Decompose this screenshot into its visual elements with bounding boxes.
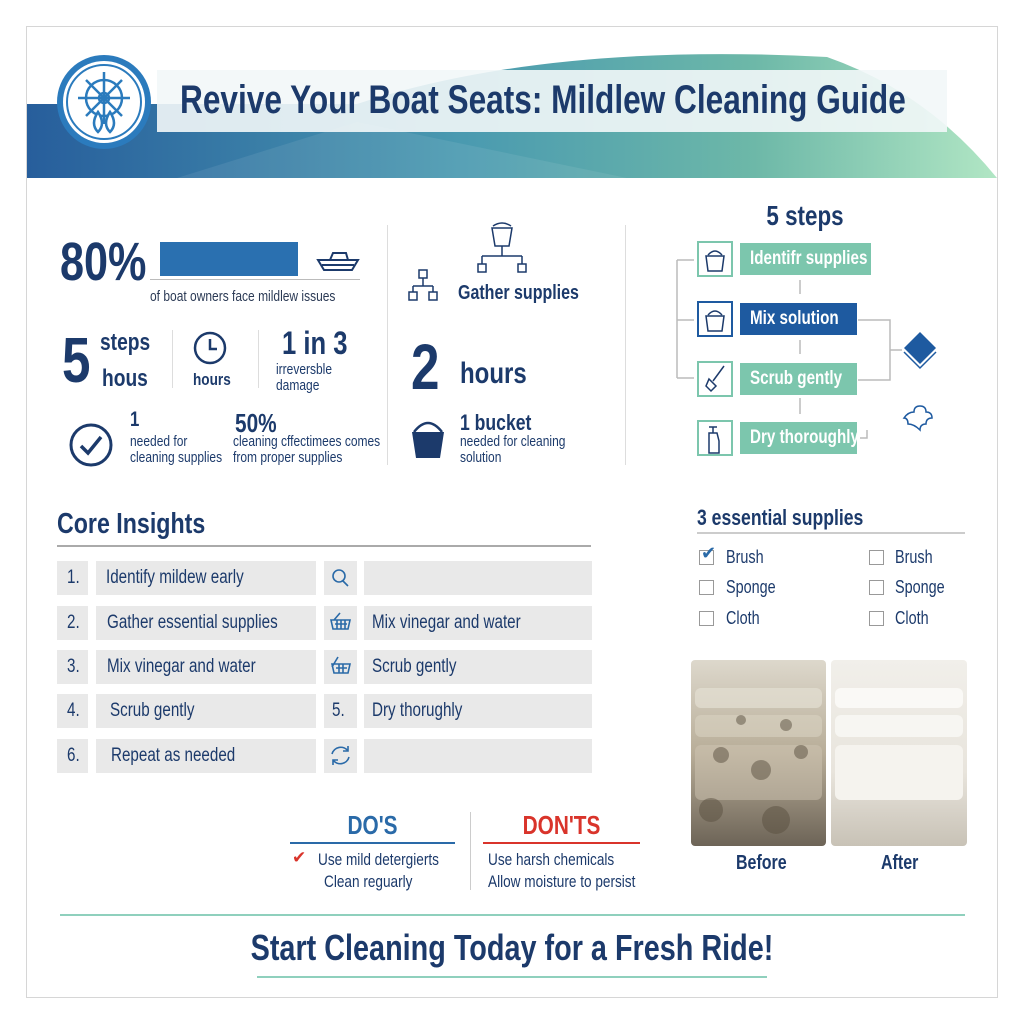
stat: supplies: from proper supplies [233, 449, 342, 466]
don'ts: Allow moisture to persist [488, 872, 635, 891]
5 steps flowchart [676, 200, 936, 456]
middle column stats: needed for cleaning [460, 433, 565, 450]
middle column stats: 2 [411, 331, 439, 403]
icon: ship wheel logo [57, 55, 151, 149]
insights table: 1. [67, 567, 80, 588]
do's: DO'S [347, 810, 398, 840]
middle column stats: solution [460, 449, 501, 466]
3 essential supplies: Cloth [726, 608, 760, 628]
stat: 5 steps: irreversble [276, 361, 332, 378]
3 essential supplies: Sponge [726, 577, 776, 597]
3 essential supplies: Cloth [895, 608, 929, 628]
5 steps flowchart: Dry thoroughly [750, 427, 857, 448]
header banner [27, 54, 997, 178]
stat: 5 steps: damage [276, 377, 319, 394]
do's: ✔ [292, 848, 306, 867]
5 steps flowchart: Mix solution [750, 308, 839, 329]
stat: supplies: cleaning supplies [130, 449, 222, 466]
do's: Use mild detergierts [318, 850, 439, 869]
insights table: 3. [67, 656, 80, 677]
icon: boat [316, 252, 360, 271]
don'ts [483, 810, 640, 891]
title: Revive Your Boat Seats: Mildlew Cleaning Guide [180, 78, 906, 122]
stat: 80%: of boat owners face mildlew issues [150, 288, 335, 305]
3 essential supplies: Brush [726, 547, 764, 567]
stat: 5 steps: steps [100, 329, 150, 356]
stat: 80%: 80% [60, 232, 146, 292]
insights table: Mix vinegar and water [107, 656, 256, 677]
3 essential supplies: Brush [895, 547, 933, 567]
middle column stats: 1 bucket [460, 410, 531, 435]
stat: supplies: cleaning cffectimees comes [233, 433, 380, 450]
insights table: Mix vinegar and water [372, 612, 521, 633]
icon: bucket tree [408, 222, 527, 301]
Core Insights heading: Core Insights [57, 508, 205, 540]
insights table: Repeat as needed [111, 745, 235, 766]
insights table: 6. [67, 745, 80, 766]
5 steps flowchart: 5 steps [766, 200, 844, 231]
stat: supplies: 1 [130, 408, 139, 431]
middle column stats: hours [460, 357, 527, 390]
insights table [57, 561, 592, 773]
insights table: Identify mildew early [106, 567, 244, 588]
stat: 80% [60, 232, 360, 305]
insights table: Scrub gently [372, 656, 456, 677]
middle column stats [408, 222, 579, 466]
stat: 5 steps [62, 324, 347, 396]
before/after photos: Before [736, 852, 787, 874]
footer call to action: Start Cleaning Today for a Fresh Ride! [251, 927, 773, 968]
insights table: 4. [67, 700, 80, 721]
before/after photos: After [881, 852, 918, 874]
stat: 5 steps: hous [102, 365, 148, 392]
icon: clock [194, 332, 226, 364]
insights table: 5. [332, 700, 345, 721]
5 steps flowchart: Scrub gently [750, 368, 842, 389]
don'ts: Use harsh chemicals [488, 850, 614, 869]
stat: 5 steps: 1 in 3 [282, 325, 347, 361]
stat: supplies: 50% [235, 408, 277, 438]
stat: supplies [70, 408, 380, 466]
do's [290, 810, 455, 891]
dividers [387, 225, 388, 465]
stat: supplies: needed for [130, 433, 187, 450]
3 essential supplies: Sponge [895, 577, 945, 597]
do's: Clean reguarly [324, 872, 412, 891]
insights table: 2. [67, 612, 80, 633]
middle column stats: Gather supplies [458, 282, 579, 304]
insights table: Gather essential supplies [107, 612, 278, 633]
insights table: Dry thorughly [372, 700, 462, 721]
don'ts: DON'TS [523, 810, 600, 840]
before/after photos [691, 660, 967, 874]
insights table: Scrub gently [110, 700, 194, 721]
icon: filled bucket [412, 422, 444, 458]
3 essential supplies: ✔ [701, 543, 716, 563]
stat: 5 steps: hours [193, 370, 231, 389]
3 essential supplies [697, 505, 965, 628]
5 steps flowchart: Identifr supplies [750, 248, 867, 269]
stat: 5 steps: 5 [62, 324, 90, 396]
3 essential supplies: 3 essential supplies [697, 505, 863, 530]
